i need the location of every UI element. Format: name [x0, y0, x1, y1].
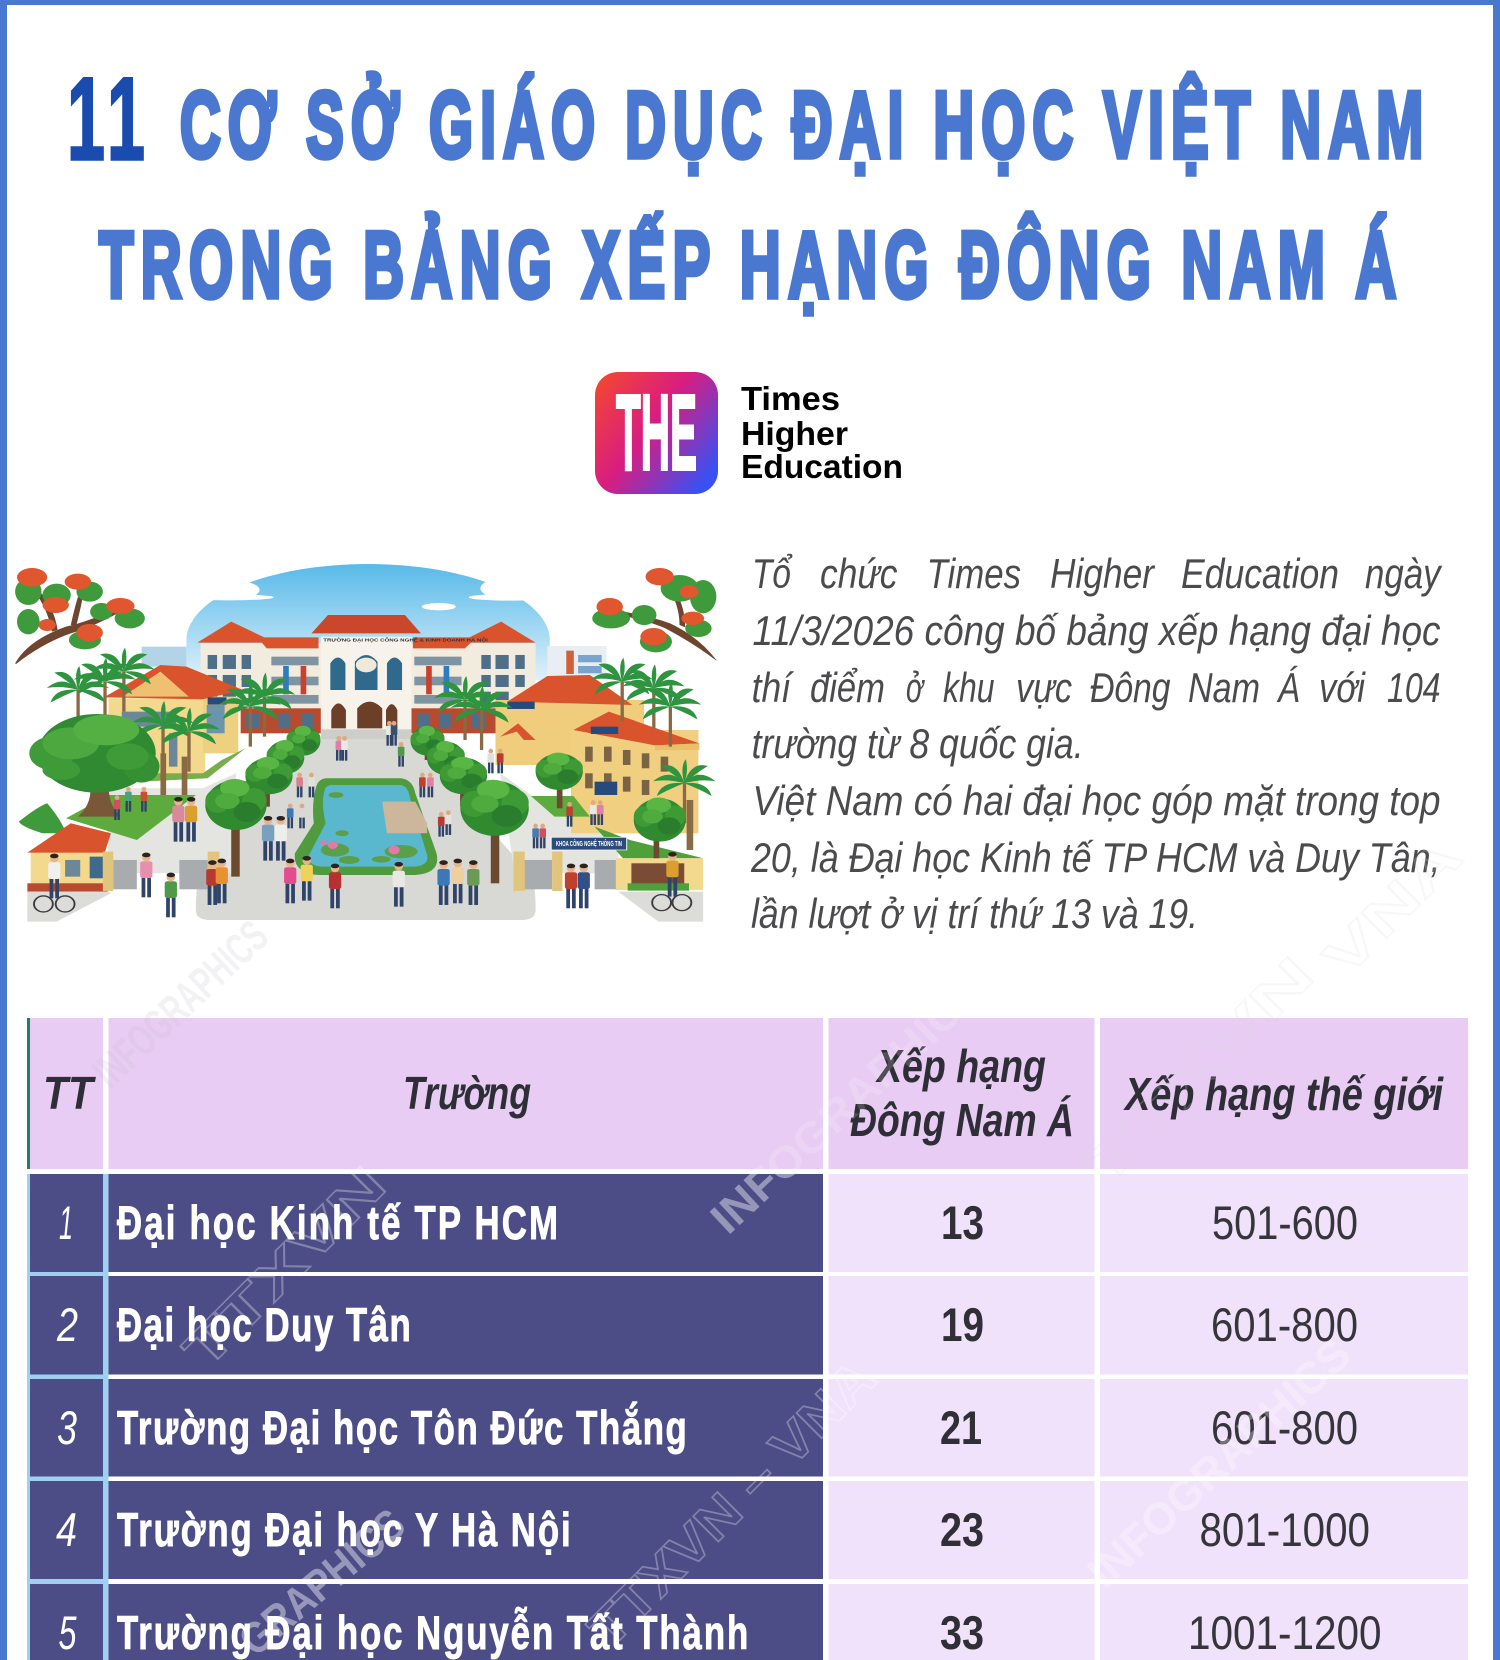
sidewalks — [27, 892, 703, 922]
paragraph line 3: 104 — [1387, 664, 1440, 711]
paragraph line 1: Higher — [1050, 550, 1156, 597]
title: TRONG BẢNG XẾP HẠNG ĐÔNG NAM Á — [99, 212, 1396, 318]
table header row: TT — [43, 1067, 96, 1119]
intro paragraph — [750, 550, 1443, 937]
paragraph line 3 — [752, 664, 1440, 711]
row 2: Đại học Duy Tân — [117, 1299, 411, 1351]
paragraph line 3: vực — [1016, 664, 1072, 711]
paragraph line 3: Nam — [1188, 664, 1260, 711]
logo badge — [595, 372, 718, 494]
students — [114, 721, 604, 917]
paragraph line 1: Tổ — [752, 550, 793, 597]
row 2 — [56, 1298, 1358, 1351]
front gate and fences: KHOA CÔNG NGHỆ THÔNG TIN — [556, 839, 622, 848]
clouds — [157, 579, 549, 626]
watermarks: INFOGRAPHICS — [701, 965, 994, 1243]
row 5: Trường Đại học Nguyễn Tất Thành — [117, 1607, 748, 1659]
watermarks: INFOGRAPHICS — [701, 965, 994, 1243]
row 3 — [57, 1401, 1358, 1454]
row 4: 4 — [56, 1503, 77, 1556]
watermarks: TTXVN — [172, 1156, 397, 1380]
left building: library — [104, 665, 245, 783]
row 3: 601-800 — [1211, 1401, 1358, 1454]
plaza — [196, 739, 536, 920]
row 1: 13 — [941, 1196, 984, 1249]
title: CƠ SỞ GIÁO DỤC ĐẠI HỌC VIỆT NAM — [180, 72, 1423, 178]
table header row — [27, 1018, 1468, 1169]
watermarks: INFOGRAPHICS — [83, 911, 278, 1097]
watermarks: VNA — [1312, 827, 1474, 988]
avenue trees — [205, 726, 686, 883]
cyclists — [34, 852, 691, 912]
row 5 — [58, 1606, 1382, 1659]
paragraph line 4: trường từ 8 quốc gia. — [752, 720, 1084, 767]
row 5: 33 — [940, 1606, 984, 1659]
title number: 1 — [67, 54, 105, 186]
ranking table — [27, 1018, 1468, 1660]
logo: Times Higher Education: THE — [616, 372, 697, 492]
row 1: Đại học Kinh tế TP HCM — [117, 1197, 558, 1249]
table row backgrounds — [27, 1174, 1468, 1660]
logo wordmark — [741, 380, 903, 485]
row 3: 3 — [57, 1401, 77, 1454]
title — [67, 54, 1423, 318]
table header row: Xếp hạng — [875, 1040, 1046, 1092]
front gate and fences — [103, 837, 703, 891]
row 3: Trường Đại học Tôn Đức Thắng — [117, 1402, 687, 1454]
row 5: 1001-1200 — [1188, 1606, 1382, 1659]
gatehouse — [27, 823, 111, 892]
row 4 — [56, 1503, 1370, 1556]
lawns — [66, 795, 703, 858]
banyan tree — [19, 714, 160, 833]
main building — [197, 615, 536, 739]
paragraph line 7: lần lượt ở vị trí thứ 13 và 19. — [751, 890, 1198, 937]
right buildings — [495, 675, 699, 833]
row 1: 1 — [59, 1196, 73, 1249]
background city — [142, 646, 606, 679]
paragraph line 3: điểm — [810, 664, 885, 711]
title number: 1 — [107, 54, 145, 186]
side walkways — [106, 773, 618, 873]
row 2: 601-800 — [1211, 1298, 1358, 1351]
logo wordmark: Higher — [741, 415, 848, 452]
watermarks: INFOGRAPHICS — [1078, 1330, 1360, 1597]
watermarks — [83, 827, 1474, 1660]
logo wordmark: Times — [741, 380, 840, 417]
logo wordmark: Education — [741, 448, 903, 485]
table header row: Trường — [403, 1067, 531, 1119]
paragraph line 1: chức — [820, 550, 898, 597]
row 5: 5 — [58, 1606, 77, 1659]
flamboyant branch: top right — [592, 568, 716, 661]
watermarks: TTXVN – VNA — [577, 1349, 887, 1658]
paragraph line 3: Đông — [1090, 664, 1170, 711]
palms — [47, 648, 715, 850]
paragraph line 3: ở — [906, 664, 925, 711]
row 4: Trường Đại học Y Hà Nội — [117, 1504, 571, 1556]
paragraph line 3: khu — [943, 664, 994, 711]
main building: TRƯỜNG ĐẠI HỌC CÔNG NGHỆ & KINH DOANH HÀ NỘI — [323, 637, 488, 643]
row 1: 501-600 — [1212, 1196, 1358, 1249]
watermarks: TTXVN — [1072, 945, 1326, 1198]
logo: Times Higher Education — [595, 372, 903, 494]
paragraph line 1: Education — [1181, 550, 1339, 597]
paragraph line 3: với — [1319, 664, 1366, 711]
illustration: university campus — [15, 564, 716, 922]
row 2: 19 — [941, 1298, 984, 1351]
flamboyant branch: top left — [15, 568, 145, 664]
row 2: 2 — [56, 1298, 78, 1351]
pond — [295, 778, 437, 875]
paragraph line 1 — [752, 550, 1443, 597]
row 4: 23 — [940, 1503, 984, 1556]
paragraph line 1: Times — [927, 550, 1021, 597]
row 4: 801-1000 — [1200, 1503, 1370, 1556]
paragraph line 1: ngày — [1365, 550, 1443, 597]
sky dome — [186, 564, 550, 680]
table header row: Đông Nam Á — [850, 1094, 1074, 1146]
row 3: 21 — [940, 1401, 982, 1454]
paragraph line 3: thí — [752, 664, 795, 711]
campus sign — [551, 837, 627, 850]
paragraph line 3: Á — [1276, 664, 1300, 711]
row 1 — [59, 1196, 1358, 1249]
table header row: Xếp hạng thế giới — [1123, 1068, 1444, 1120]
